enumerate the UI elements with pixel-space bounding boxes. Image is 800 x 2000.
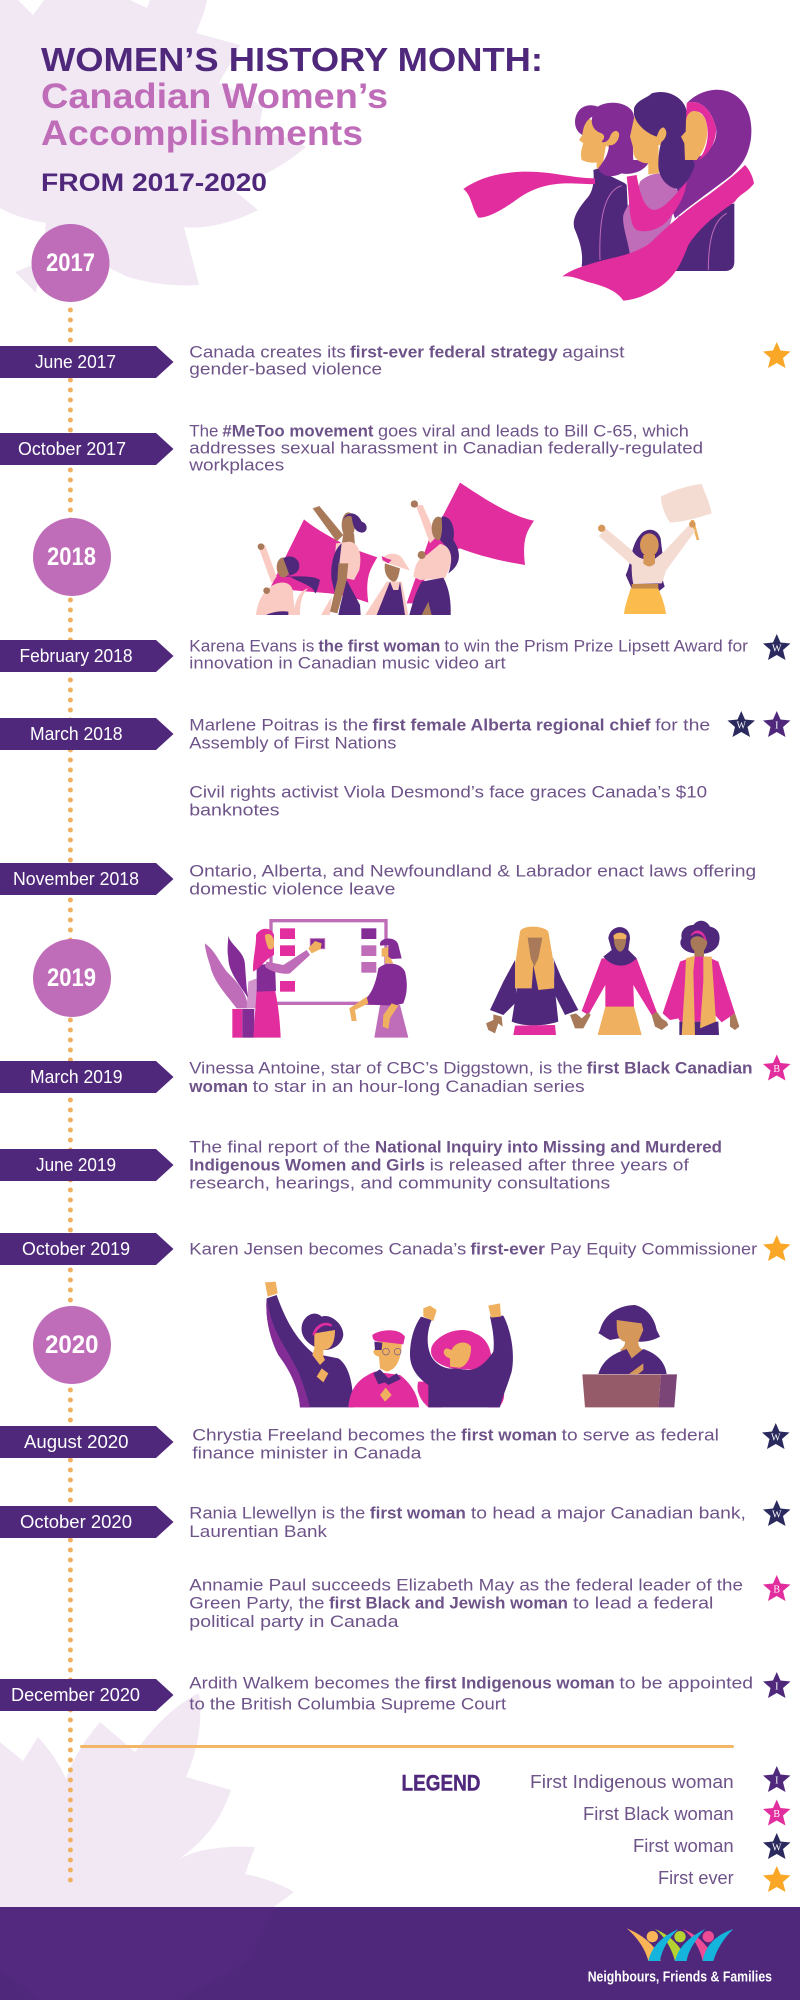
legend row: first Indigenous woman: First Indigenous woman	[530, 1772, 734, 1792]
event text: Karen Jensen: Pay Equity Commissioner	[550, 1240, 757, 1259]
star: first ever, June 2017	[763, 342, 790, 368]
legend row: first woman	[633, 1833, 790, 1859]
illustration: three women holding hands	[486, 921, 739, 1035]
star: first woman, October 2020: W	[772, 1510, 782, 1520]
event text: Rania Llewellyn: Rania Llewellyn is the	[189, 1504, 365, 1523]
date label: June 2019	[0, 1149, 174, 1181]
date label: March 2018: March 2018	[30, 724, 122, 744]
event text: Annamie Paul	[189, 1576, 743, 1631]
event text: MeToo: #MeToo movement	[222, 422, 374, 441]
event text: Karena Evans: innovation in Canadian music video art	[189, 654, 506, 673]
year badge: 2017: 2017	[46, 249, 95, 277]
event text: National Inquiry	[189, 1138, 722, 1193]
event text: National Inquiry: is released after three years of	[430, 1156, 689, 1175]
star: first woman, February 2018	[763, 634, 790, 660]
legend row: first Black woman: B	[773, 1809, 780, 1820]
illustration: woman holding a sign	[598, 484, 712, 614]
event text: Ardith Walkem: to the British Columbia Supreme Court	[189, 1695, 506, 1714]
date label: October 2017	[0, 433, 174, 465]
event text: MeToo: goes viral and leads to Bill C-65, which	[378, 422, 689, 441]
event text: Viola Desmond: Civil rights activist Viola Desmond’s face graces Canada’s $10	[189, 783, 707, 802]
event text: Karena Evans: Karena Evans is	[189, 637, 314, 656]
star: first Indigenous woman, December 2020: I	[775, 1682, 778, 1692]
event text: Chrystia Freeland: finance minister in Canada	[192, 1444, 422, 1463]
footer band	[0, 1907, 800, 2000]
star: first ever, October 2019	[763, 1235, 790, 1261]
event text: Ardith Walkem: first Indigenous woman	[424, 1674, 615, 1693]
event text: Viola Desmond: banknotes	[189, 801, 280, 820]
event text: Karena Evans	[189, 637, 748, 673]
event text: MeToo: addresses sexual harassment in Canadian federally-regulated	[189, 439, 703, 458]
event text: federal strategy: gender-based violence	[189, 360, 382, 378]
legend row: first Black woman	[583, 1800, 790, 1826]
date label: December 2020	[0, 1679, 174, 1711]
year badge: 2020: 2020	[45, 1331, 98, 1359]
event text: National Inquiry: National Inquiry into Missing and Murdered	[375, 1138, 722, 1156]
legend row: first ever: First ever	[658, 1868, 734, 1888]
event text: MeToo: The	[189, 422, 218, 441]
year badge: 2019: 2019	[47, 964, 96, 992]
illustration: woman at a podium	[582, 1305, 677, 1407]
date label: October 2019	[0, 1233, 174, 1265]
legend row: first Indigenous woman	[530, 1766, 790, 1792]
main title: FROM 2017-2020	[41, 169, 267, 197]
star: first Indigenous woman, March 2018	[763, 711, 790, 737]
main title: Accomplishments	[41, 114, 363, 153]
star: first woman, March 2018: W	[737, 720, 747, 732]
timeline dotted line	[68, 310, 73, 1890]
event text: Rania Llewellyn: to head a major Canadian bank,	[471, 1504, 746, 1523]
star: first Black woman, March 2019	[763, 1054, 790, 1080]
year badge: 2017	[32, 224, 110, 302]
date label: June 2017	[0, 346, 174, 378]
event text: Annamie Paul: first Black and Jewish woman	[329, 1594, 568, 1613]
star: first woman, March 2018	[728, 711, 755, 737]
event text: Vinessa Antoine: Vinessa Antoine, star of CBC’s Diggstown, is the	[189, 1059, 583, 1078]
date label: August 2020: August 2020	[24, 1432, 128, 1452]
illustration: group of cheering women	[265, 1282, 513, 1407]
date label: August 2020	[0, 1426, 174, 1458]
event text: MeToo	[188, 422, 703, 475]
event text: Chrystia Freeland: Chrystia Freeland becomes the	[192, 1426, 457, 1445]
event text: federal strategy: against	[562, 342, 625, 361]
event text: domestic violence leave: domestic violence leave	[189, 880, 395, 899]
event text: federal strategy: first-ever federal strategy	[350, 342, 558, 361]
legend row: first ever	[658, 1866, 790, 1892]
event text: Annamie Paul: political party in Canada	[189, 1612, 399, 1631]
event text: Annamie Paul: Green Party, the	[189, 1594, 324, 1613]
illustration: women at a planning board	[205, 921, 408, 1038]
legend row: first Indigenous woman: I	[775, 1776, 778, 1786]
background flower: top left	[0, 0, 306, 293]
legend row: first woman: First woman	[633, 1836, 734, 1856]
event text: Annamie Paul: Annamie Paul succeeds Elizabeth May as the federal leader of the	[189, 1576, 743, 1595]
event text: Marlene Poitras	[189, 715, 710, 753]
star: first Indigenous woman, March 2018: I	[775, 720, 778, 732]
year badge: 2018	[33, 518, 111, 596]
date label: October 2019: October 2019	[22, 1239, 130, 1259]
logo: Neighbours, Friends & Families	[588, 1928, 772, 1986]
star: first woman, August 2020: W	[771, 1432, 781, 1444]
date label: December 2020: December 2020	[11, 1685, 140, 1705]
date label: October 2017: October 2017	[18, 439, 126, 459]
date label: October 2020	[0, 1506, 174, 1538]
event text: Ardith Walkem: Ardith Walkem becomes the	[189, 1674, 420, 1693]
event text: domestic violence leave	[189, 862, 756, 899]
event text: Vinessa Antoine	[188, 1059, 753, 1096]
date label: June 2019: June 2019	[36, 1155, 116, 1175]
event text: Karena Evans: the first woman	[318, 637, 440, 656]
event text: Rania Llewellyn	[189, 1504, 746, 1541]
legend heading: LEGEND	[402, 1771, 480, 1796]
event text: Viola Desmond	[189, 783, 707, 820]
year badge: 2018: 2018	[47, 543, 96, 571]
event text: National Inquiry: Indigenous Women and Girls	[189, 1156, 425, 1175]
main title: WOMEN’S HISTORY MONTH:	[41, 41, 543, 78]
event text: Chrystia Freeland: to serve as federal	[562, 1426, 719, 1445]
event text: Marlene Poitras: Assembly of First Nations	[189, 734, 396, 753]
event text: federal strategy	[189, 342, 625, 378]
event text: Ardith Walkem: to be appointed	[619, 1674, 753, 1693]
star: first Black woman, Annamie Paul: B	[773, 1584, 780, 1596]
event text: Karen Jensen: Karen Jensen becomes Canada’s	[189, 1240, 466, 1259]
star: first woman, October 2020	[763, 1500, 790, 1526]
event text: Ardith Walkem	[189, 1674, 753, 1714]
event text: Chrystia Freeland: first woman	[461, 1426, 557, 1445]
legend row: first Black woman: First Black woman	[583, 1804, 734, 1824]
event text: Rania Llewellyn: Laurentian Bank	[189, 1522, 328, 1541]
event text: National Inquiry: research, hearings, and community consultations	[189, 1174, 610, 1193]
star: first Indigenous woman, December 2020	[763, 1672, 790, 1698]
date label: June 2017: June 2017	[35, 352, 116, 372]
event text: Vinessa Antoine: to star in an hour-long Canadian series	[253, 1077, 585, 1096]
year badge: 2019	[33, 939, 111, 1017]
illustration: women marching with flags	[256, 483, 534, 615]
legend row: first woman: W	[772, 1842, 782, 1854]
event text: Marlene Poitras: first female Alberta regional chief	[372, 715, 651, 734]
date label: November 2018: November 2018	[13, 869, 139, 889]
illustration: three women with scarves	[463, 90, 754, 301]
star: first Black woman, Annamie Paul	[763, 1575, 790, 1601]
year badge: 2020	[33, 1306, 111, 1384]
event text: Karen Jensen	[189, 1240, 757, 1259]
background flower: bottom left	[0, 1693, 294, 1907]
event text: Karen Jensen: first-ever	[470, 1240, 545, 1259]
event text: Karena Evans: to win the Prism Prize Lipsett Award for	[444, 637, 748, 656]
date label: March 2019: March 2019	[30, 1067, 122, 1087]
event text: Chrystia Freeland	[192, 1426, 719, 1463]
event text: domestic violence leave: Ontario, Alberta, and Newfoundland & Labrador enact laws offering	[189, 862, 756, 881]
main title	[41, 41, 543, 197]
date label: March 2018	[0, 718, 174, 750]
main title: Canadian Women’s	[41, 77, 388, 116]
event text: Marlene Poitras: Marlene Poitras is the	[189, 715, 368, 734]
event text: Vinessa Antoine: woman	[188, 1077, 248, 1096]
date label: November 2018	[0, 863, 174, 895]
event text: Vinessa Antoine: first Black Canadian	[587, 1059, 753, 1078]
event text: Annamie Paul: to lead a federal	[573, 1594, 713, 1613]
star: first woman, August 2020	[762, 1423, 790, 1449]
event text: National Inquiry: The final report of the	[189, 1138, 370, 1156]
date label: February 2018: February 2018	[20, 646, 132, 666]
date label: February 2018	[0, 640, 174, 672]
star: first Black woman, March 2019: B	[773, 1064, 780, 1075]
star: first woman, February 2018: W	[772, 644, 782, 654]
event text: federal strategy: Canada creates its	[189, 342, 346, 361]
legend	[402, 1766, 790, 1892]
date label: March 2019	[0, 1061, 174, 1093]
date label: October 2020: October 2020	[20, 1512, 132, 1532]
event text: Rania Llewellyn: first woman	[370, 1504, 466, 1523]
event text: MeToo: workplaces	[188, 456, 284, 475]
event text: Marlene Poitras: for the	[655, 715, 710, 734]
